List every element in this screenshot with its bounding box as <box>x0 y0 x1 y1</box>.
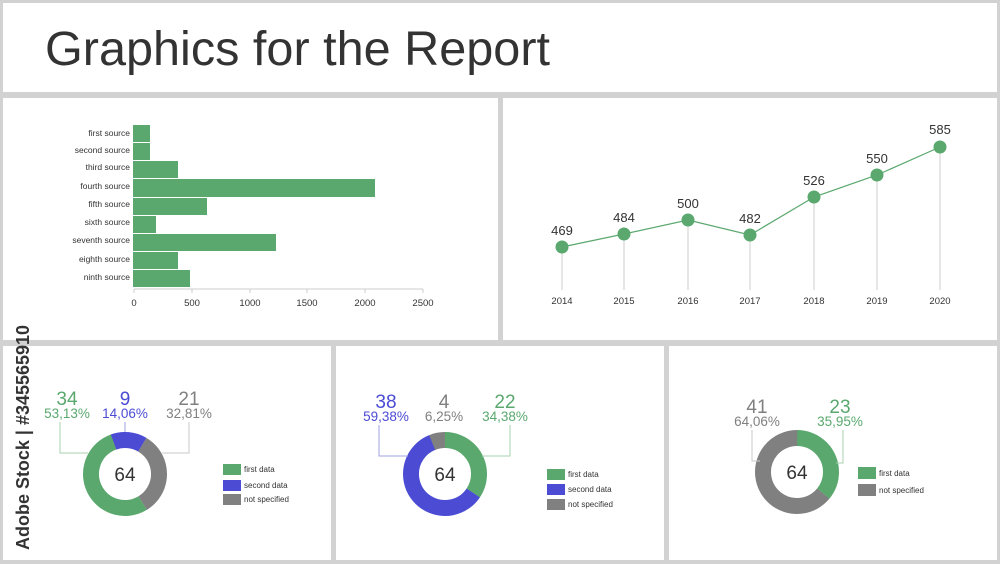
donut chart 2 <box>398 427 492 521</box>
bar chart: second source <box>75 145 130 155</box>
bar chart: 2500 <box>412 298 434 309</box>
bar chart: eighth source <box>79 254 130 264</box>
legend 1: not specified <box>244 495 289 504</box>
donut 2 labels: 38 <box>375 392 397 413</box>
legend 2: first data <box>568 470 599 479</box>
line chart: 2016 <box>677 296 699 307</box>
legend 2: second data <box>568 485 612 494</box>
legend 3: first data <box>879 469 910 478</box>
donut 2 labels <box>363 392 528 456</box>
watermark: vertical stock id: Adobe Stock | #345565910 <box>13 325 33 550</box>
legend 1 <box>223 464 289 505</box>
title: Graphics for the Report <box>45 23 550 76</box>
line chart: 550 <box>866 151 888 166</box>
donut 2 labels: 34,38% <box>482 409 528 424</box>
donut 3 labels: 64,06% <box>734 414 780 429</box>
bar chart: ninth source <box>84 272 130 282</box>
donut 2 labels: 6,25% <box>425 409 463 424</box>
donut 2 labels: 59,38% <box>363 409 409 424</box>
legend 2: not specified <box>568 500 613 509</box>
bar chart: fourth source <box>80 181 130 191</box>
donut 1 labels: 14,06% <box>102 406 148 421</box>
line chart: 469 <box>551 223 573 238</box>
donut 1 labels: 21 <box>178 389 200 410</box>
donut 2 labels: 4 <box>439 392 450 413</box>
bar chart: first source <box>88 128 130 138</box>
line chart: 2017 <box>739 296 761 307</box>
line chart: 585 <box>929 122 951 137</box>
bar chart: 2000 <box>354 298 376 309</box>
legend 1: second data <box>244 481 288 490</box>
line chart: 500 <box>677 196 699 211</box>
panel: line chart <box>503 98 997 340</box>
bar chart: 500 <box>184 298 200 309</box>
panel: donut 1: 64 <box>114 465 136 486</box>
donut 3 labels: 41 <box>746 397 768 418</box>
donut 1 labels: 32,81% <box>166 406 212 421</box>
line chart: 2014 <box>551 296 573 307</box>
line chart <box>551 122 951 307</box>
line chart: 526 <box>803 173 825 188</box>
legend 3: not specified <box>879 486 924 495</box>
donut 2 labels: 22 <box>494 392 516 413</box>
donut 3 labels <box>734 397 863 463</box>
donut chart 3 <box>749 424 845 520</box>
donut 1 labels: 9 <box>120 389 130 410</box>
bar chart: 0 <box>131 298 137 309</box>
line chart: 2015 <box>613 296 635 307</box>
donut 1 labels <box>44 389 212 453</box>
donut 3 labels: 35,95% <box>817 414 863 429</box>
panel: donut 1 <box>3 346 331 560</box>
donut 3 labels: 23 <box>829 397 851 418</box>
panel: bar chart <box>3 98 498 340</box>
panel: title <box>3 3 997 92</box>
donut 1 labels: 53,13% <box>44 406 90 421</box>
line chart: 2019 <box>866 296 888 307</box>
donut chart 1 <box>78 427 172 521</box>
donut 1 labels: 34 <box>56 389 78 410</box>
line chart: 484 <box>613 210 635 225</box>
line chart: 2018 <box>803 296 825 307</box>
bar chart: third source <box>86 162 130 172</box>
legend 1: first data <box>244 465 275 474</box>
bar chart: fifth source <box>88 199 130 209</box>
panel: donut 2 <box>336 346 664 560</box>
bar chart: 1500 <box>296 298 318 309</box>
line chart: 2020 <box>929 296 951 307</box>
bar chart: sixth source <box>85 217 130 227</box>
panel: donut 2: 64 <box>434 465 456 486</box>
legend 3 <box>858 467 924 496</box>
legend 2 <box>547 469 613 510</box>
line chart: 482 <box>739 211 761 226</box>
panel: donut 3 <box>669 346 997 560</box>
bar chart: 1000 <box>239 298 261 309</box>
panel: donut 3: 64 <box>786 463 808 484</box>
bar chart <box>72 125 434 309</box>
bar chart: seventh source <box>72 235 130 245</box>
